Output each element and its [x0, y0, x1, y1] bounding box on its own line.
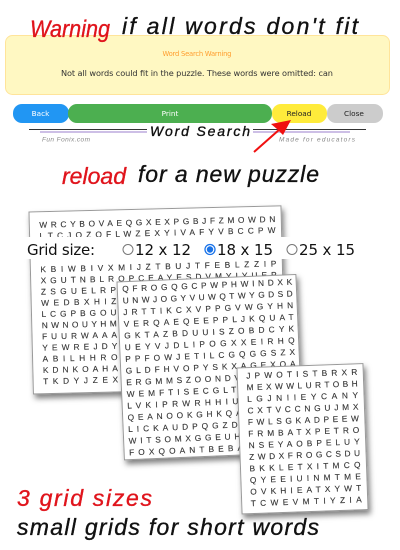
- panel: small grid: TCWEVMTIYZIA: [251, 494, 362, 508]
- panel: small grid: FWLSGKADPEEW: [248, 413, 359, 427]
- grid size selector: 18 x 15: [217, 241, 273, 259]
- word search header: Word Search: [150, 123, 250, 139]
- caption: grid sizes: small grids for short words: [17, 514, 320, 540]
- panel: large grid: XGUTNBLRQPCEAYESDVMYIYUEP: [41, 270, 277, 285]
- panel: large grid: LTCJOZOFLWZEXYIVAFYVBCCPW: [39, 225, 276, 241]
- panel: small grid: NSEYAOBPELUY: [249, 436, 360, 450]
- word search header: [29, 123, 366, 144]
- panel: large grid: LCGPBGOU: [41, 307, 117, 319]
- panel: large grid: WEDBXHIZ: [41, 296, 116, 308]
- panel: medium grid: LVKIPRWRHHIUZSNBJU: [127, 394, 297, 411]
- panel: medium grid: GKTAZBDUUISZOBDCYK: [124, 323, 295, 341]
- heading: warning: [30, 13, 360, 43]
- heading: warning: Warning: [30, 16, 111, 43]
- panel: medium grid: UEYVJDLIPOGXXEIRHQ: [125, 335, 295, 352]
- panel: medium grid: QFROGQGCPWPHWINDXK: [122, 277, 293, 294]
- grid size selector: [0, 237, 400, 259]
- panel: medium grid: FOXQOANTBEBASRIVGA: [129, 440, 300, 457]
- warning box: Word Search Warning: [162, 50, 232, 58]
- button bar: Print: [162, 109, 179, 118]
- panel: large grid: KBIWBIVXMIJZTBUJTFEBLZZIP: [40, 258, 277, 274]
- panel: large grid: ZSGUELRP: [41, 285, 117, 297]
- grid size selector: Grid size:: [27, 241, 95, 259]
- button bar: Back: [32, 109, 50, 118]
- panel: small grid: [237, 364, 368, 514]
- panel: large grid: NWNOUYHM: [42, 318, 117, 330]
- panel: small grid: JPWOTISTBRXR: [246, 367, 357, 381]
- panel: medium grid: GLDFHVOPYSKXAGEXOA: [126, 358, 296, 376]
- panel: large grid: WRCYBOVAEQGXEXPGBJFZMOWDN: [39, 214, 275, 230]
- panel: small grid: BKKLETXITMCQ: [249, 460, 361, 473]
- grid size selector: 12 x 12: [135, 241, 191, 259]
- panel: medium grid: ERGMMSZOONDVMQTYAV: [126, 370, 297, 387]
- arrow: to reload button: [254, 120, 291, 152]
- panel: medium grid: [117, 275, 303, 460]
- panel: medium grid: LICKAUDPQGZDXEHWYD: [128, 417, 298, 434]
- panel: small grid: OVKHIEATXYWT: [250, 483, 361, 497]
- panel: small grid: QYEEIUINMTME: [250, 471, 361, 485]
- heading: warning: if all words don't fit: [122, 13, 360, 39]
- heading: reload: for a new puzzle: [138, 161, 319, 187]
- panel: medium grid: QEANOOKGHKQAFTLMRA: [127, 405, 298, 422]
- warning box: Not all words could fit in the puzzle. These words were omitted: can: [61, 68, 333, 78]
- panel: medium grid: UNWJOGYVUWQTWYGDSD: [123, 288, 293, 305]
- panel: small grid: LGJNIIEYCANY: [247, 390, 359, 404]
- panel: medium grid: VERQAEQEEPPLJKQUAT: [124, 312, 294, 329]
- caption: grid sizes: 3 grid sizes: [17, 485, 152, 511]
- panel: small grid: ZWDXFROGCSDU: [249, 448, 360, 462]
- panel: large grid: KDNKOAHA: [43, 363, 118, 375]
- word search header: Fun Fonix.com: [42, 136, 91, 144]
- panel: small grid: MEXWWLURTOBH: [247, 378, 358, 392]
- panel: small grid: CXTVCCNGUJMX: [247, 402, 359, 415]
- heading: reload: reload: [62, 163, 127, 189]
- word search header: Made for educators: [279, 136, 356, 144]
- panel: large grid: TKDYJZEX: [43, 374, 119, 386]
- panel: large grid: YEWREJDY: [42, 341, 118, 353]
- panel: medium grid: JRTTIKCXVPPGVWGYHN: [123, 300, 293, 317]
- button bar: Reload: [287, 109, 311, 118]
- panel: large grid: FUURWAAA: [42, 330, 118, 341]
- button bar: Close: [344, 109, 364, 118]
- warning box: [6, 36, 390, 94]
- caption: grid sizes: [17, 485, 320, 540]
- panel: large grid: [29, 206, 285, 394]
- panel: medium grid: WEMFTISECGLTWPEKOT: [126, 382, 297, 399]
- heading: reload: [62, 161, 319, 189]
- panel: large grid: ABILHHRO: [42, 352, 118, 364]
- panel: medium grid: WITSOMXGGEUHNCOPKH: [128, 429, 299, 446]
- panel: small grid: FRMBATXPETRO: [248, 425, 360, 439]
- grid size selector: 25 x 15: [299, 241, 355, 259]
- button bar: [13, 104, 383, 123]
- panel: medium grid: PPFOWJETILCGQGGSZX: [125, 347, 296, 364]
